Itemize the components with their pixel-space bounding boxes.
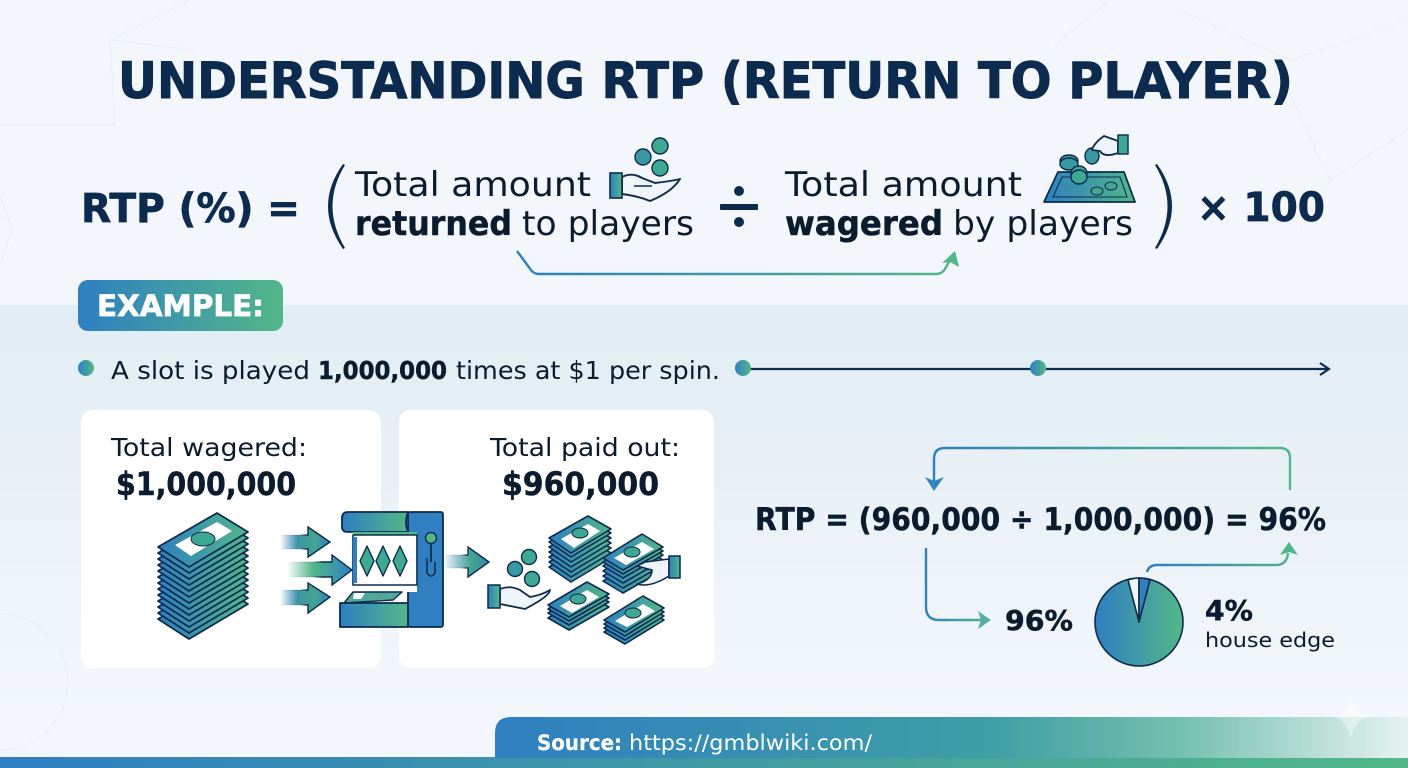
division sign — [720, 186, 758, 227]
pie chart — [1095, 578, 1183, 666]
icon: hand with coins — [488, 550, 550, 609]
source tab: https://gmblwiki.com/ — [629, 731, 873, 755]
formula label: RTP (%) = — [81, 186, 300, 232]
denominator text: by players — [953, 204, 1133, 244]
icon: slot machine — [340, 512, 443, 627]
calculation equation: RTP = (960,000 ÷ 1,000,000) = 96% — [755, 502, 1326, 538]
icon: money stack — [158, 513, 248, 639]
denominator text: Total amount — [784, 165, 1022, 205]
wagered label: Total wagered: — [110, 433, 307, 462]
example statement: 1,000,000 — [318, 356, 447, 385]
arrows into machine — [280, 527, 352, 613]
denominator text — [784, 165, 1133, 244]
arrow: returned to wagered — [517, 251, 959, 274]
denominator text: wagered — [785, 204, 943, 244]
wagered amount: $1,000,000 — [116, 465, 296, 503]
icon: sparkle — [1335, 700, 1367, 738]
arrow: to 96 percent — [926, 548, 991, 629]
value: 4 percent house edge: 4% — [1205, 594, 1253, 627]
icon: cash stacks — [548, 516, 664, 644]
numerator text — [354, 165, 694, 244]
value: 4 percent house edge — [1205, 594, 1335, 652]
times 100: × 100 — [1197, 185, 1325, 231]
numerator text: to players — [522, 204, 694, 244]
example statement — [78, 356, 720, 385]
example statement: A slot is played — [111, 356, 310, 385]
value: 4 percent house edge: house edge — [1205, 628, 1335, 652]
left parenthesis — [328, 164, 345, 249]
panel: total paid out — [399, 410, 714, 668]
panel: total wagered — [81, 410, 381, 668]
arrow: house edge to result — [1147, 542, 1298, 572]
title: UNDERSTANDING RTP (RETURN TO PLAYER) — [118, 52, 1293, 110]
icon: hand taking cash — [637, 556, 680, 585]
arrow: loop back to numerator — [925, 448, 1290, 491]
example badge: EXAMPLE: — [97, 289, 264, 323]
icon: coins dropped into tray — [1044, 135, 1135, 202]
numerator text: Total amount — [354, 165, 591, 205]
value: 96 percent: 96% — [1005, 604, 1073, 637]
timeline arrow — [735, 360, 1329, 376]
paid out label: Total paid out: — [489, 433, 680, 462]
RTP formula — [81, 135, 1325, 274]
source tab — [495, 717, 1408, 758]
paid out amount: $960,000 — [502, 465, 659, 503]
example badge — [78, 280, 283, 331]
right parenthesis — [1155, 164, 1172, 249]
example statement: times at $1 per spin. — [456, 356, 720, 385]
source tab: Source: — [537, 731, 622, 755]
numerator text: returned — [355, 204, 512, 244]
RTP calculation — [755, 448, 1335, 666]
icon: hand receiving coins — [610, 138, 680, 201]
footer bar — [0, 757, 1408, 768]
arrow out of machine — [443, 547, 489, 577]
